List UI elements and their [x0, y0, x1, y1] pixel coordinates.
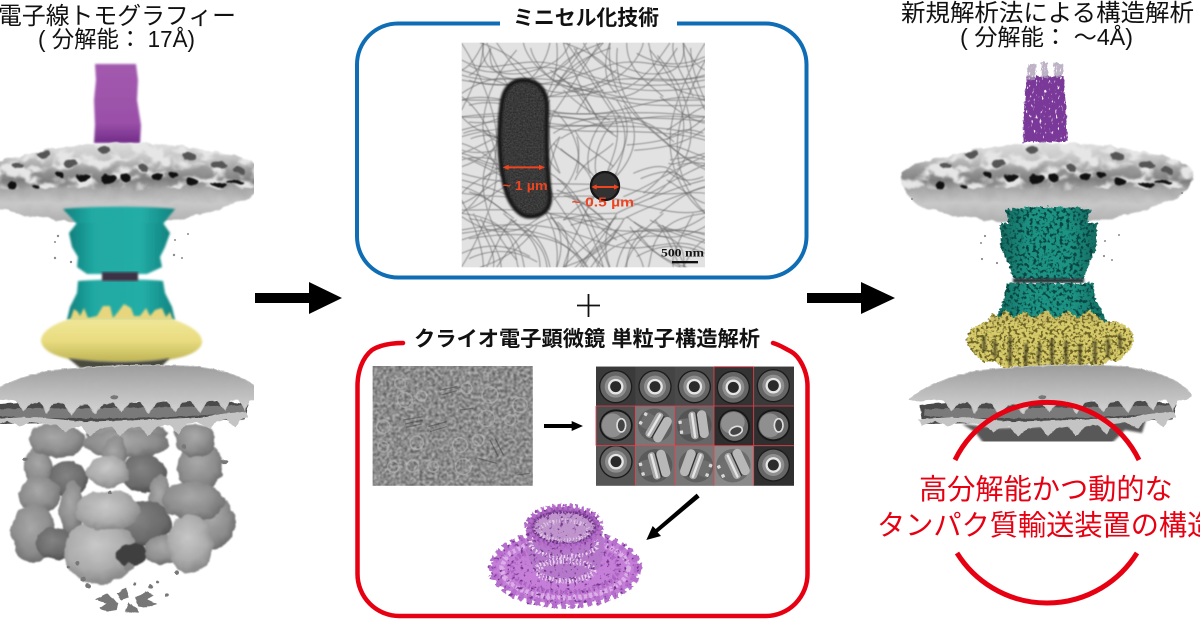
micrograph: negative stain	[462, 43, 712, 273]
title: electron tomography	[0, 3, 236, 52]
dark gap in rotor	[1013, 278, 1084, 283]
conclusion text: 高分解能かつ動的な	[919, 473, 1173, 505]
yellow patches	[70, 304, 173, 320]
minicell	[591, 172, 619, 200]
title: new analysis method: 新規解析法による構造解析	[901, 0, 1194, 27]
gray upper ring	[0, 142, 270, 224]
heading: ミニセル化技術	[513, 6, 659, 30]
debris fragments	[22, 445, 228, 613]
red measure annotations: ~ 1 µm	[503, 178, 548, 193]
panel: cryo-EM single particle analysis	[358, 328, 808, 616]
heading: クライオ電子顕微鏡 単粒子構造解析	[414, 328, 760, 351]
blue frame	[357, 23, 807, 278]
raw cryo-EM micrograph	[373, 366, 533, 486]
purple filament	[94, 64, 141, 143]
plus sign	[577, 294, 600, 317]
teal rotor	[993, 207, 1107, 322]
scattered specks	[54, 233, 189, 263]
title: electron tomography: 電子線トモグラフィー	[0, 3, 236, 30]
teal rotor	[63, 207, 175, 320]
arrow: left big	[255, 282, 342, 314]
upper arc	[955, 402, 1139, 460]
purple basal body model	[492, 507, 638, 604]
title: new analysis method: ( 分解能： ～4Å)	[960, 23, 1133, 50]
red measure annotations: ~ 0.5 µm	[572, 195, 634, 210]
yellow ring	[967, 310, 1134, 373]
title: electron tomography: ( 分解能： 17Å)	[38, 25, 195, 52]
lower arc	[957, 553, 1137, 603]
filaments	[462, 43, 712, 273]
gray lower complex	[11, 423, 236, 613]
callout: red circle with conclusion	[877, 402, 1200, 603]
2D class averages	[596, 367, 794, 488]
large cell	[497, 78, 553, 218]
scattered specks	[911, 192, 1183, 264]
arrow: right big	[807, 282, 895, 314]
arrow: to class averages	[544, 421, 583, 431]
panel: minicell technology	[357, 6, 807, 278]
conclusion text	[877, 473, 1200, 541]
scale bar: 500 nm	[661, 246, 704, 260]
purple filament	[1023, 62, 1067, 142]
arrow: to 3D model	[646, 494, 700, 540]
structure: high-resolution map	[898, 62, 1198, 445]
title: new analysis method	[901, 0, 1194, 50]
structure: tomography map	[0, 64, 270, 613]
red frame	[358, 343, 808, 616]
yellow ring ribs	[984, 336, 1120, 368]
gray upper ring	[898, 142, 1198, 224]
yellow ring	[41, 319, 202, 362]
gray lower ring	[910, 365, 1191, 445]
dark neck	[102, 272, 138, 281]
dark base of ring	[68, 358, 170, 368]
red measure annotations	[503, 165, 634, 210]
gray lower ring	[0, 365, 263, 437]
